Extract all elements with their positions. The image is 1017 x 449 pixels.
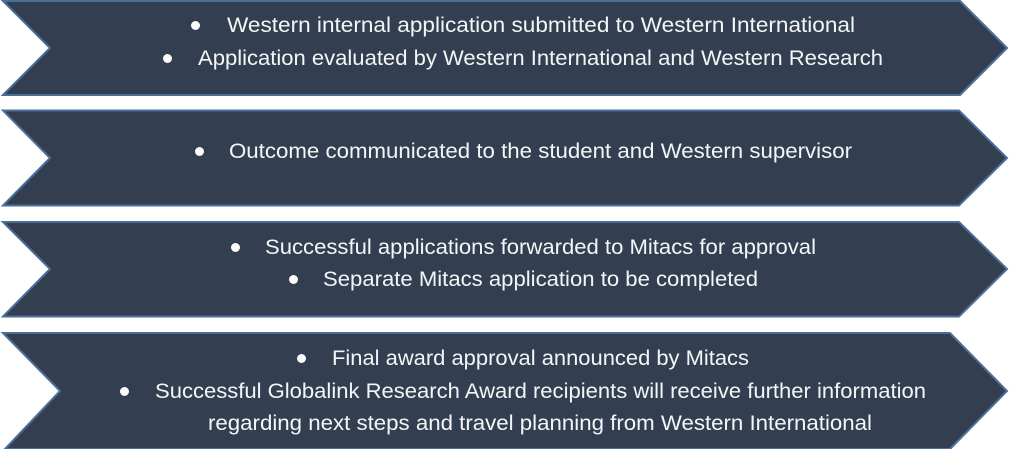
step 4: final award approval: Final award approval announced by Mitacs [332,347,749,370]
step 1: application submission and evaluation [3,1,1007,95]
step 3: forwarded to Mitacs [3,222,1007,316]
step 2: outcome communicated [3,110,1007,206]
step 3: forwarded to Mitacs: Separate Mitacs application to be completed [323,268,758,291]
step 4: final award approval: Successful Globalink Research Award recipients will receive further information [155,380,926,403]
step 1: application submission and evaluation: Application evaluated by Western International and Western Research [198,47,883,70]
step 4: final award approval [3,333,1007,449]
step 1: application submission and evaluation: Western internal application submitted to Western International [227,14,855,37]
step 4: final award approval: regarding next steps and travel planning from Western International [208,412,872,435]
step 2: outcome communicated: Outcome communicated to the student and Western supervisor [229,140,852,163]
step 3: forwarded to Mitacs: Successful applications forwarded to Mitacs for approval [265,236,816,259]
